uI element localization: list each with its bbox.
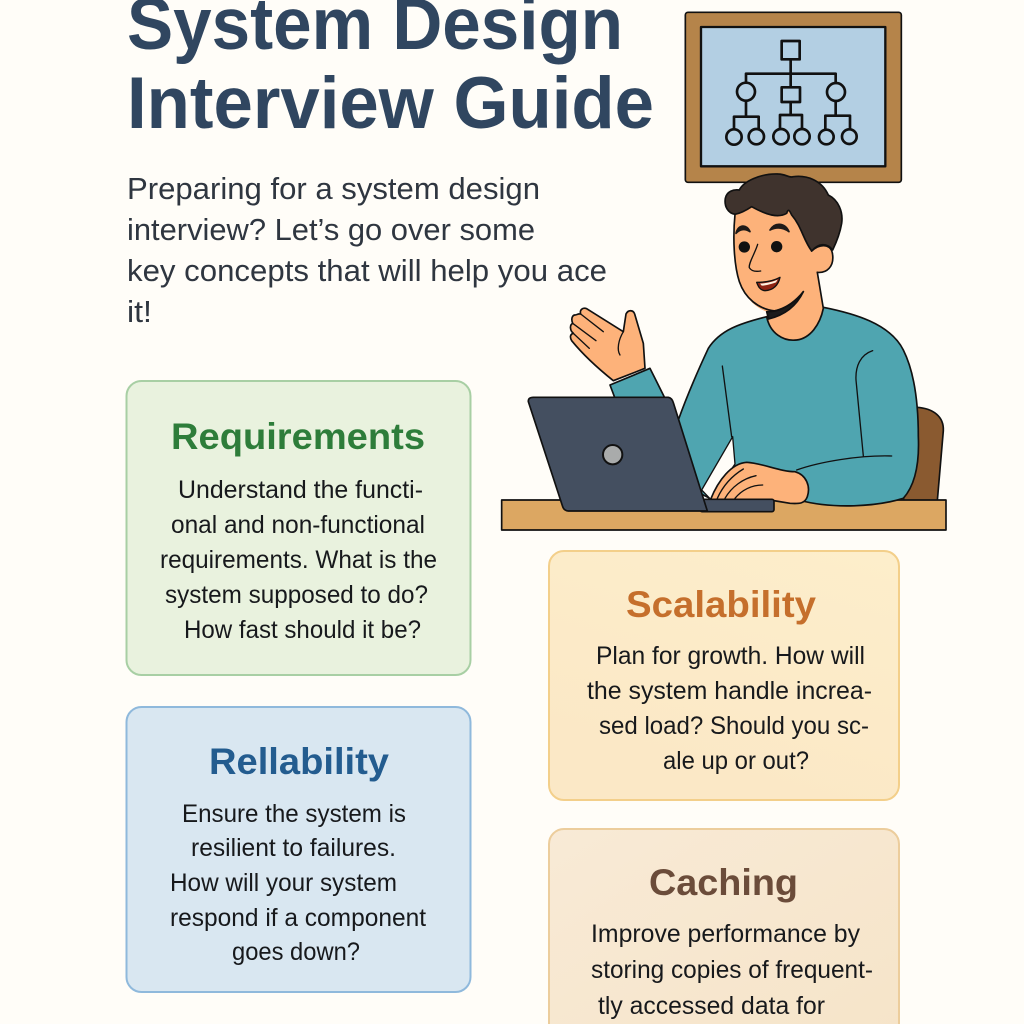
- panel: caching: [549, 829, 899, 1024]
- chair: [903, 407, 943, 501]
- hand shape: [570, 308, 645, 381]
- eyebrows: [736, 224, 789, 233]
- heading: caching: Caching: [649, 862, 798, 903]
- sweater fold lines: [722, 351, 892, 470]
- panel: requirements: [126, 381, 470, 675]
- panel: scalability: [549, 551, 899, 800]
- body: reliability: goes down?: [232, 938, 360, 966]
- heading: requirements: Requirements: [171, 416, 425, 457]
- body: caching: Improve performance by: [591, 920, 860, 948]
- title: [127, 0, 654, 144]
- head: [725, 174, 842, 340]
- face and neck outline: [734, 214, 823, 340]
- intro text: interview? Let’s go over some: [127, 212, 535, 247]
- torso and arms: [678, 307, 919, 506]
- panel: reliability: [126, 707, 470, 992]
- laptop logo: [603, 445, 622, 464]
- body: reliability: [170, 800, 426, 966]
- finger lines: [717, 469, 763, 498]
- body: requirements: onal and non-functional: [171, 511, 425, 539]
- desk: [502, 500, 946, 530]
- gap between arm and torso: [702, 437, 735, 499]
- laptop base: [700, 499, 774, 512]
- body: requirements: requirements. What is the: [160, 546, 437, 574]
- intro text: Preparing for a system design: [127, 171, 540, 206]
- body: requirements: system supposed to do?: [165, 581, 428, 609]
- body: reliability: Ensure the system is: [182, 800, 406, 828]
- body: scalability: the system handle increa-: [587, 677, 872, 705]
- finger lines: [573, 314, 623, 355]
- illustration: person at laptop: [502, 174, 946, 530]
- intro text: it!: [127, 294, 152, 329]
- eyes: [739, 241, 782, 253]
- ear: [812, 246, 833, 272]
- title: Interview Guide: [127, 63, 654, 144]
- intro text: key concepts that will help you ace: [127, 253, 607, 288]
- body: caching: [591, 920, 873, 1020]
- intro text: [127, 171, 607, 329]
- teeth: [760, 280, 778, 286]
- body: scalability: [587, 642, 872, 775]
- body: reliability: respond if a component: [170, 904, 426, 932]
- body: scalability: Plan for growth. How will: [596, 642, 865, 670]
- heading: scalability: Scalability: [626, 584, 816, 625]
- icon: framed system diagram: [685, 12, 901, 182]
- body: reliability: How will your system: [170, 869, 397, 897]
- body: caching: storing copies of frequent-: [591, 956, 873, 984]
- face and neck fill: [734, 198, 830, 340]
- hair: [725, 174, 842, 251]
- hand shape: [711, 462, 808, 504]
- keyboard hand: [711, 462, 808, 504]
- heading: reliability: Rellability: [209, 741, 389, 782]
- raised sleeve: [610, 368, 665, 398]
- body: requirements: How fast should it be?: [184, 616, 421, 644]
- body: scalability: sed load? Should you sc-: [599, 712, 869, 740]
- collar shadow: [767, 292, 803, 319]
- mouth: [757, 277, 780, 291]
- body: requirements: Understand the functi-: [178, 476, 423, 504]
- body: reliability: resilient to failures.: [191, 834, 396, 862]
- body: requirements: [160, 476, 437, 644]
- raised hand: [570, 308, 645, 381]
- laptop lid: [528, 397, 707, 511]
- nose: [749, 244, 761, 271]
- body: caching: tly accessed data for: [598, 992, 825, 1020]
- body: scalability: ale up or out?: [663, 747, 809, 775]
